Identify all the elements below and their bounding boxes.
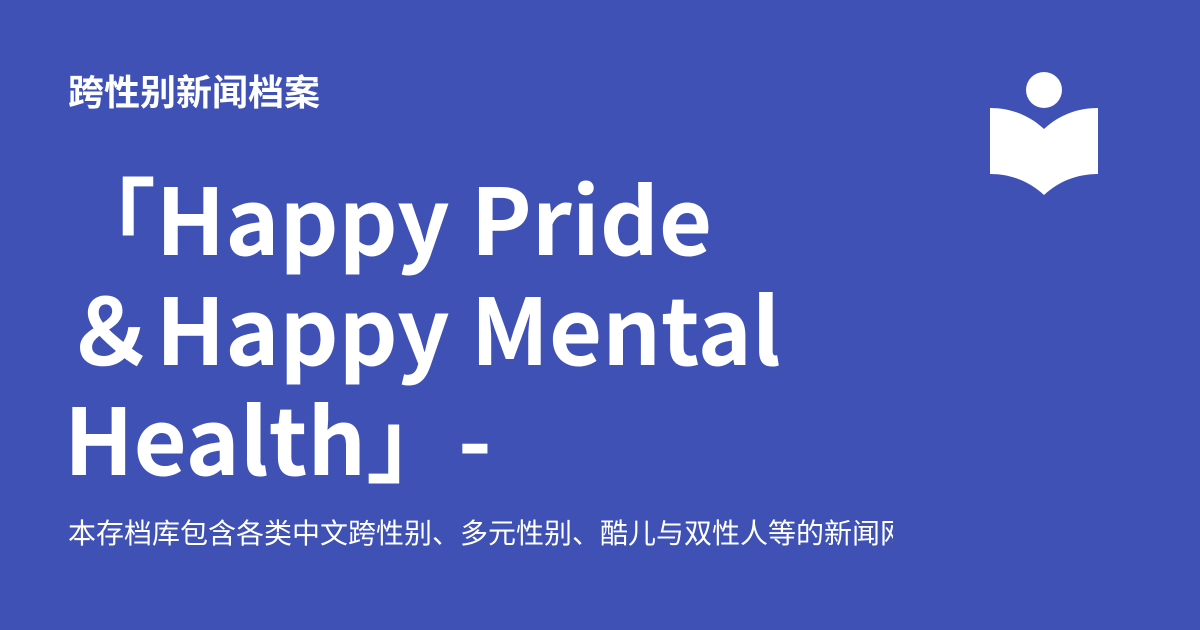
main title: Health」- [64, 370, 492, 502]
icon: person reading book logo [990, 72, 1098, 195]
main title: 「Happy Pride [64, 150, 712, 282]
main title: ＆Happy Mental [64, 260, 781, 392]
main title [64, 150, 781, 502]
site name heading: 跨性别新闻档案 [68, 64, 320, 116]
